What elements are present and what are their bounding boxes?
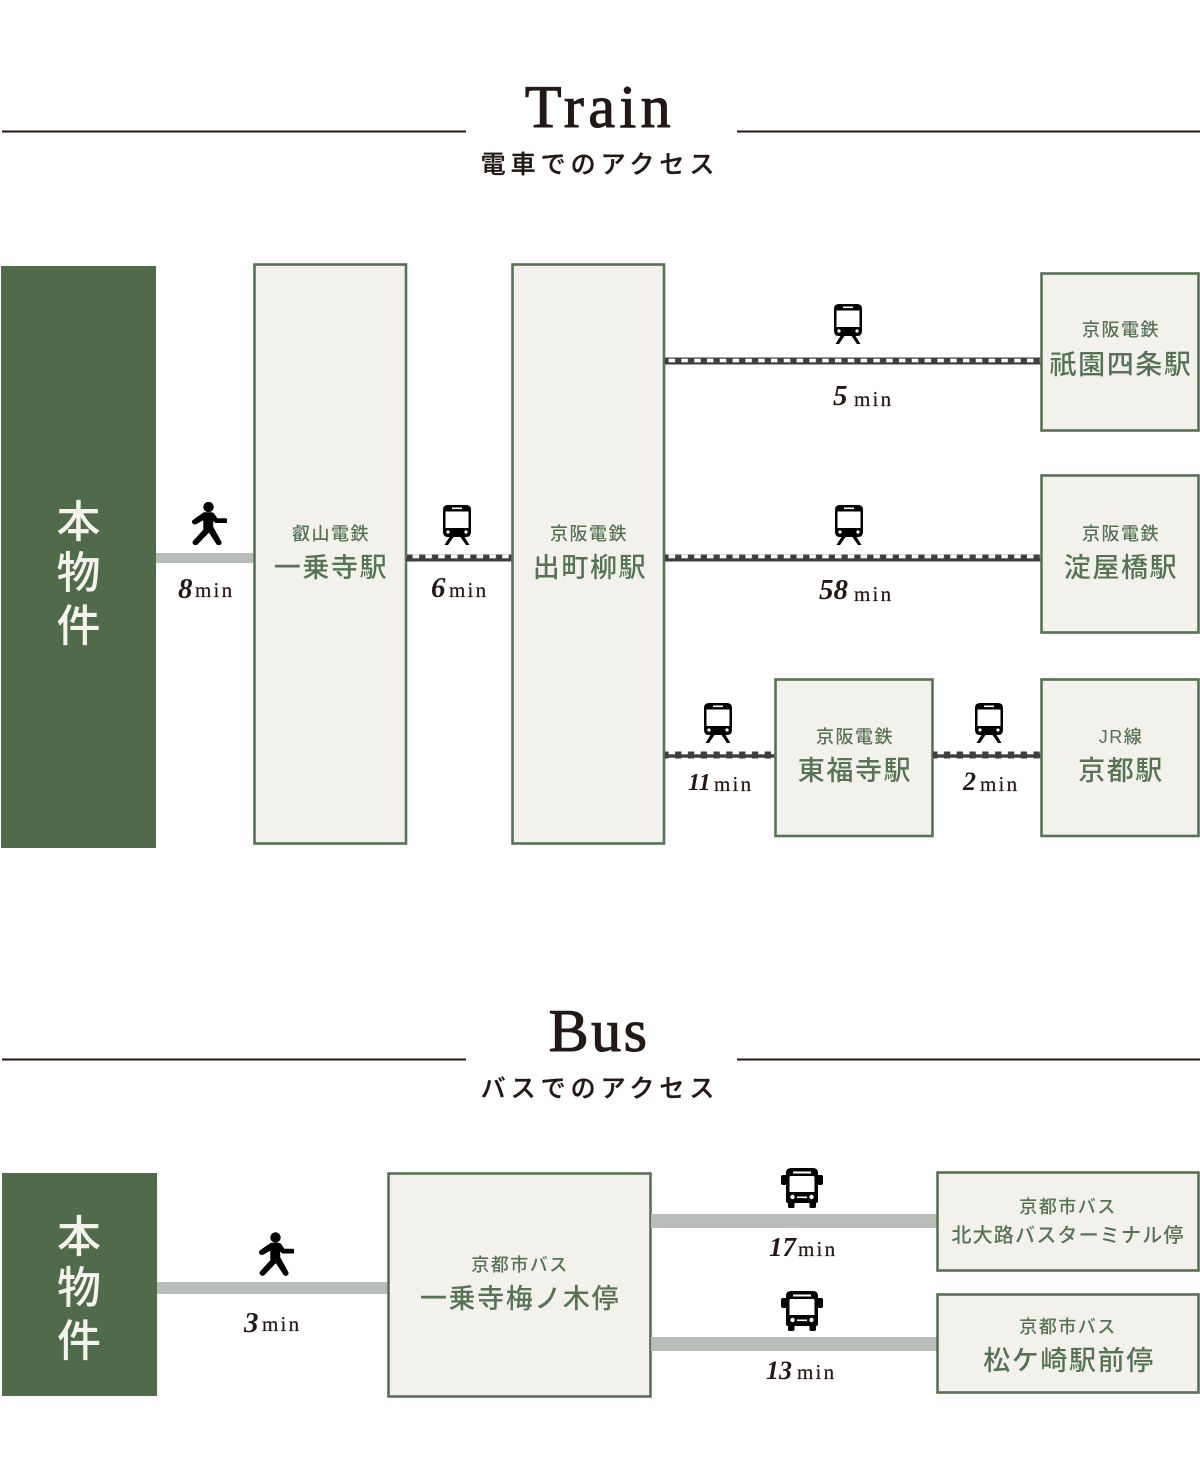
connector: walk 3 min [157,1232,388,1339]
connector: train 11 min: 11 [688,770,711,796]
heading: Bus: バスでのアクセス [481,1075,719,1103]
connector: train 2 min: 2 [962,767,976,796]
panel: property (bus): 件 [57,1317,101,1366]
connector: train 5 min: 5 [833,380,848,412]
station: Kitaoji bus terminal [938,1172,1198,1270]
connector: bus 17 min [651,1168,937,1262]
station: Gion-Shijo: 祇園四条駅 [1050,350,1192,380]
panel: property (bus) [2,1173,157,1396]
station: Ichijoji Umenoki bus stop [388,1174,650,1396]
connector: train 5 min: min [854,387,893,411]
connector: train 11 min: min [714,772,753,796]
station: Demachiyanagi: 京阪電鉄 [550,524,628,544]
station: Gion-Shijo: 京阪電鉄 [1082,320,1160,340]
station: Kyoto [1042,680,1198,836]
connector: train 58 min: min [854,582,893,606]
station: Yodoyabashi [1042,476,1198,632]
connector: bus 13 min: 13 [766,1356,792,1385]
station: Yodoyabashi: 淀屋橋駅 [1064,553,1178,583]
connector: bus 17 min: 17 [769,1232,798,1262]
station: Matsugasaki-eki-mae bus stop: 松ケ崎駅前停 [983,1346,1155,1376]
panel: property (train) [1,266,156,848]
station: Kitaoji bus terminal: 北大路バスターミナル停 [951,1224,1185,1247]
connector: train 11 min [665,703,775,796]
station: Tofukuji: 東福寺駅 [798,756,912,786]
station: Demachiyanagi [512,264,664,844]
connector: train 5 min [665,304,1041,412]
connector: bus 13 min [651,1291,937,1385]
heading: Train [2,74,1200,179]
connector: walk to Ichijoji [156,502,254,605]
connector: bus 13 min: min [797,1360,836,1384]
station: Yodoyabashi: 京阪電鉄 [1082,524,1160,544]
connector: train 58 min: 58 [819,574,848,606]
panel: property (bus): 本 [57,1213,101,1262]
connector: bus 17 min: min [798,1237,837,1261]
connector: train 6 min: 6 [431,572,446,604]
station: Tofukuji [776,680,932,836]
station: Gion-Shijo [1042,274,1198,430]
connector: train 2 min [933,703,1041,796]
station: Tofukuji: 京阪電鉄 [816,727,894,747]
connector: walk 3 min: 3 [243,1307,258,1339]
station: Ichijoji: 一乗寺駅 [274,553,388,583]
panel: property (bus): 物 [57,1264,101,1313]
connector: walk 3 min: min [262,1312,301,1336]
connector: train 6 min [406,505,512,604]
heading: Train: Train [525,74,675,140]
connector: train 6 min: min [449,578,488,602]
connector: train 2 min: min [980,772,1019,796]
connector: walk to Ichijoji: 8 [178,573,193,605]
heading: Bus [2,998,1200,1103]
station: Ichijoji Umenoki bus stop: 京都市バス [471,1255,569,1275]
heading: Train: 電車でのアクセス [481,151,719,179]
station: Ichijoji Umenoki bus stop: 一乗寺梅ノ木停 [420,1284,620,1314]
connector: walk to Ichijoji: min [195,578,234,602]
heading: Bus: Bus [549,998,649,1064]
panel: property (train): 件 [56,602,100,651]
station: Matsugasaki-eki-mae bus stop [938,1294,1198,1392]
panel: property (train): 本 [56,498,100,547]
panel: property (train): 物 [56,549,100,598]
connector: train 58 min [665,505,1041,606]
station: Ichijoji: 叡山電鉄 [292,524,370,544]
station: Demachiyanagi: 出町柳駅 [533,553,647,583]
station: Matsugasaki-eki-mae bus stop: 京都市バス [1019,1317,1117,1337]
station: Kyoto: JR線 [1099,727,1143,747]
station: Kyoto: 京都駅 [1078,756,1164,786]
station: Kitaoji bus terminal: 京都市バス [1019,1197,1117,1217]
station: Ichijoji [254,264,406,844]
